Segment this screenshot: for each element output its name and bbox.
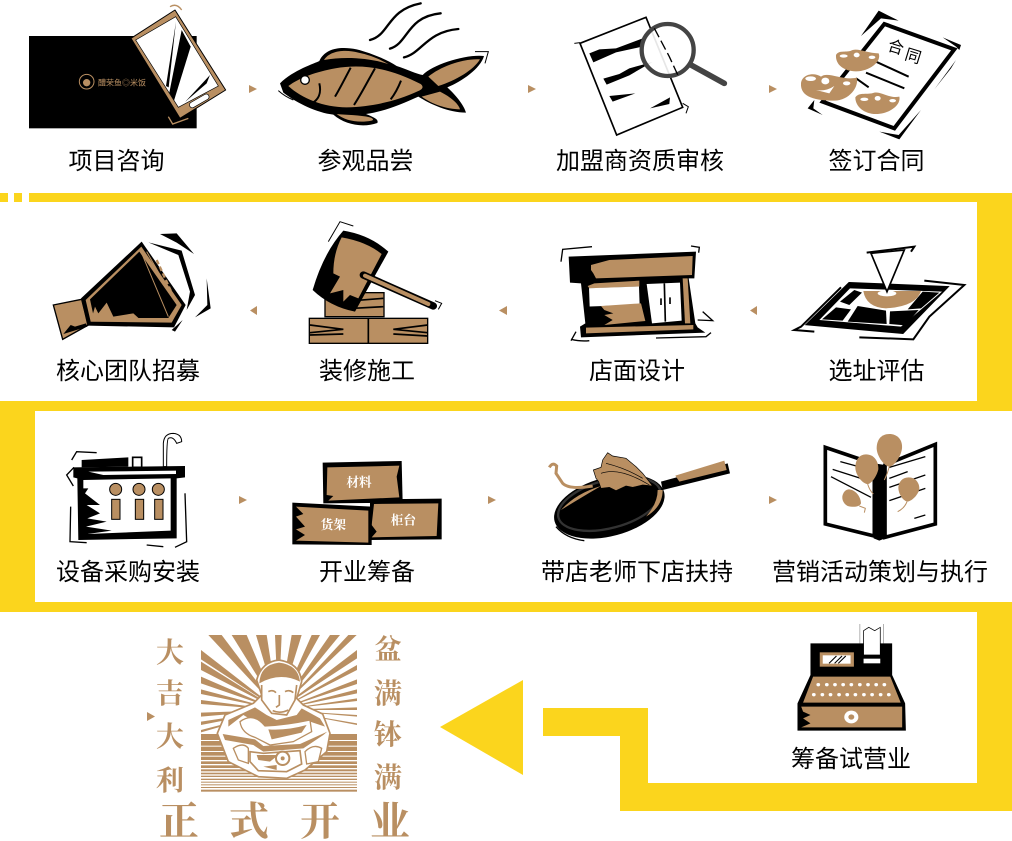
fish bbox=[240, 718, 312, 745]
heading: 大吉大利: 吉 bbox=[156, 678, 184, 710]
heading: 大吉大利: 大 bbox=[156, 637, 184, 669]
heading: 大吉大利 bbox=[156, 637, 184, 797]
icon: grilled fish bbox=[278, 3, 488, 125]
shoulders bbox=[228, 707, 325, 727]
icon: open menu with balloons bbox=[825, 434, 935, 541]
icon: storefront bbox=[561, 246, 713, 341]
icon: stacked wood crates: 材料 bbox=[346, 474, 372, 489]
yellow serpentine path bbox=[0, 193, 1012, 811]
icon: contract and gold ingots: 同 bbox=[903, 47, 923, 68]
label: 营销活动策划与执行: 营销活动策划与执行 bbox=[772, 559, 988, 586]
label: 核心团队招募: 核心团队招募 bbox=[56, 358, 200, 385]
small step arrows bbox=[147, 85, 777, 721]
label: 选址评估: 选址评估 bbox=[828, 358, 924, 385]
heading: 盆满钵满: 满 bbox=[374, 762, 402, 794]
heading: 大吉大利: 大 bbox=[156, 721, 184, 753]
heading: 大吉大利: 利 bbox=[156, 765, 184, 797]
icon: stacked wood crates: 柜台 bbox=[391, 512, 416, 527]
heading: 盆满钵满: 钵 bbox=[374, 719, 402, 751]
label: 签订合同: 签订合同 bbox=[828, 148, 924, 175]
label: 参观品尝: 参观品尝 bbox=[318, 148, 414, 175]
label: 装修施工: 装修施工 bbox=[319, 358, 415, 385]
icon: document with magnifier bbox=[574, 17, 724, 135]
emblem: man holding fish in rays bbox=[201, 635, 357, 792]
heading: 盆满钵满: 盆 bbox=[374, 634, 402, 666]
label: 筹备试营业: 筹备试营业 bbox=[791, 746, 911, 773]
icon: frying pan with chicken bbox=[547, 453, 730, 550]
heading: 正式开业 bbox=[159, 799, 410, 841]
platter bbox=[223, 732, 327, 752]
icon: megaphone bbox=[53, 233, 211, 339]
icon: contract and gold ingots bbox=[801, 11, 961, 139]
icon: black card and phone: 醴荣鱼◎米饭 bbox=[98, 78, 146, 88]
label: 开业筹备: 开业筹备 bbox=[319, 559, 415, 586]
label: 加盟商资质审核: 加盟商资质审核 bbox=[556, 148, 724, 175]
hands bbox=[233, 745, 248, 763]
icon: cash register bbox=[797, 624, 906, 731]
striped ground bbox=[201, 734, 357, 792]
icon: black card and phone bbox=[29, 5, 226, 128]
heading: 盆满钵满 bbox=[374, 634, 402, 794]
label: 带店老师下店扶持: 带店老师下店扶持 bbox=[541, 559, 733, 586]
sun rays bbox=[201, 635, 357, 732]
icon: contract and gold ingots: 合 bbox=[885, 37, 906, 59]
figure silhouette bbox=[217, 660, 330, 778]
face features bbox=[262, 685, 297, 715]
icon: gavel on wood bbox=[309, 222, 442, 343]
heading: 盆满钵满: 满 bbox=[374, 678, 402, 710]
label: 项目咨询: 项目咨询 bbox=[68, 148, 164, 175]
hat bbox=[259, 663, 300, 683]
icon: stacked wood crates: 货架 bbox=[321, 517, 346, 532]
icon: stacked wood crates bbox=[292, 461, 442, 545]
label: 店面设计: 店面设计 bbox=[589, 358, 685, 385]
icon: map with location pin bbox=[794, 247, 964, 339]
icon: equipment machine bbox=[67, 433, 187, 547]
label: 设备采购安装: 设备采购安装 bbox=[56, 559, 200, 586]
